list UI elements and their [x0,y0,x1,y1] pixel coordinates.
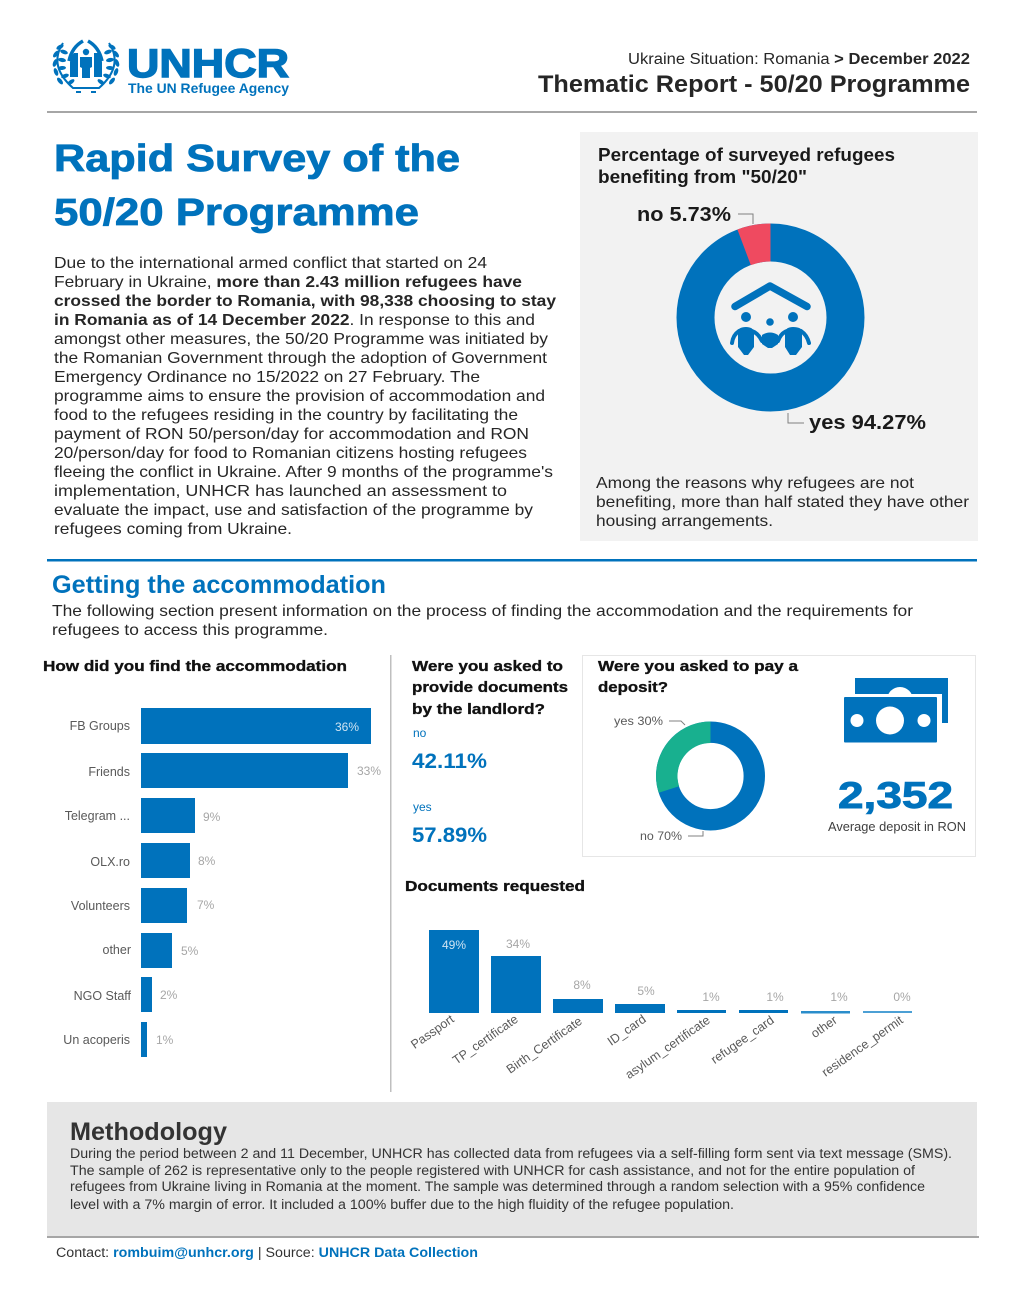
category labels: Telegram ... [65,809,130,823]
column labels: Passport [408,1012,457,1052]
main title [54,138,460,234]
value labels [156,720,381,1047]
section heading: Getting the accommodation [52,571,386,599]
panel note [596,475,970,530]
columns [429,930,912,1014]
column labels: asylum_certificate [623,1013,713,1082]
category labels: Volunteers [71,899,130,913]
column labels [408,1012,906,1082]
column values: 49% [442,938,466,952]
value labels: 8% [198,854,216,868]
column labels: ID_card [605,1012,649,1049]
value labels: 5% [181,944,199,958]
column labels: Birth_Certificate [504,1014,585,1076]
panel heading: Percentage of surveyed refugees [598,145,895,165]
introduction text: Due to the international armed conflict that started on 24 [54,255,487,272]
question heading [412,658,568,718]
stat: yes: yes [413,800,432,814]
donut chart: benefiting [696,223,846,392]
report context: Ukraine Situation: Romania > December 2022 [628,51,970,68]
callout: no [640,829,703,843]
icon: banknotes [844,678,948,742]
deposit heading: Were you asked to pay a [598,658,799,675]
introduction text: Emergency Ordinance no 15/2022 on 27 February. The [54,369,480,386]
methodology text [70,1146,952,1212]
value labels: 36% [335,720,359,734]
introduction text: the Romanian Government through the adoption of Government [54,350,548,367]
methodology heading: Methodology [70,1118,227,1146]
stat: no [412,726,487,773]
stat: yes [412,800,487,847]
value labels: 9% [203,810,221,824]
bar chart: finding accommodation [43,658,381,1057]
column values: 34% [506,937,530,951]
callout: yes [614,714,685,728]
column values: 0% [893,990,911,1004]
column values: 1% [830,990,848,1004]
panel note: benefiting, more than half stated they have other [596,494,970,511]
panel heading: benefiting from "50/20" [598,167,807,187]
category labels [63,719,132,1047]
introduction text: amongst other measures, the 50/20 Programme was initiated by [54,331,548,348]
stat: yes: 57.89% [412,824,487,847]
stat: no: 42.11% [412,750,487,773]
main title: Rapid Survey of the [54,138,460,180]
panel: methodology [47,1102,977,1237]
stat: average deposit: 2,352 [838,775,953,816]
logo tagline: The UN Refugee Agency [128,80,289,96]
value labels: 1% [156,1033,174,1047]
introduction text: evaluate the impact, use and satisfaction of the programme by [54,502,533,519]
category labels: FB Groups [70,719,130,733]
introduction text: 20/person/day for food to Romanian citizens hosting refugees [54,445,527,462]
deposit heading [598,658,799,696]
chart heading: Documents requested [405,878,585,895]
column chart: documents requested [405,878,912,1082]
section intro [52,603,914,639]
question heading: by the landlord? [412,701,545,718]
column labels: other [808,1013,840,1041]
main title: 50/20 Programme [54,192,419,234]
report title: Thematic Report - 50/20 Programme [538,71,970,98]
category labels: OLX.ro [90,855,130,869]
category labels: other [102,943,131,957]
documents question [412,658,568,847]
stat caption: Average deposit in RON [828,820,966,834]
chart heading: How did you find the accommodation [43,658,347,675]
introduction text: food to the refugees residing in the country by facilitating the [54,407,518,424]
header text [538,51,970,98]
column labels: TP_certificate [450,1012,521,1067]
introduction text: programme aims to ensure the provision of accommodation and [54,388,545,405]
panel note: Among the reasons why refugees are not [596,475,915,492]
introduction text: fleeing the conflict in Ukraine. After 9 months of the programme's [54,464,553,481]
column values: 5% [637,984,655,998]
introduction text: crossed the border to Romania, with 98,338 choosing to stay [54,293,556,310]
panel: percentage benefiting [580,132,978,541]
panel note: housing arrangements. [596,513,773,530]
donut chart: deposit [656,722,754,820]
panel heading [598,145,895,187]
methodology text: The sample of 262 is representative only to the people registered with UNHCR for cash assistance, and not for the entire population of [70,1163,915,1178]
introduction text: in Romania as of 14 December 2022 . In response to this and [54,312,535,329]
question heading: Were you asked to [412,658,563,675]
column values: 1% [702,990,720,1004]
icon: UNHCR emblem [52,41,120,93]
footer: Contact: rombuim@unhcr.org | Source: UNHCR Data Collection [56,1245,478,1260]
value labels: 33% [357,764,381,778]
column labels: refugee_card [708,1013,777,1067]
callout: no: no 70% [640,829,682,843]
introduction text: implementation, UNHCR has launched an assessment to [54,483,507,500]
category labels: Un acoperis [63,1033,130,1047]
icon: family under roof [732,286,809,355]
callout: yes: yes 94.27% [809,412,926,434]
question heading: provide documents [412,679,568,696]
callout: no: no 5.73% [637,204,731,226]
category labels: Friends [88,765,130,779]
column labels: residence_permit [819,1013,906,1079]
column values: 1% [766,990,784,1004]
panel: deposit [582,656,976,856]
bars [141,708,371,1057]
methodology text: refugees from Ukraine living in Romania at the moment. The sample was determined through a random selection with a 95% confidence [70,1179,925,1194]
UNHCR logo [52,41,289,96]
value labels: 7% [197,898,215,912]
introduction text: February in Ukraine, more than 2.43 million refugees have [54,274,522,291]
value labels: 2% [160,988,178,1002]
section intro: The following section present information on the process of finding the accommodation and the requirements for [52,603,914,620]
introduction text [54,255,556,538]
stat: no: no [413,726,427,740]
methodology text: level with a 7% margin of error. It included a 100% buffer due to the high fluidity of the refugee population. [70,1197,734,1212]
methodology text: During the period between 2 and 11 December, UNHCR has collected data from refugees via a self-filling form sent via text message (SMS). [70,1146,952,1161]
callout: yes: yes 30% [614,714,663,728]
introduction text: refugees coming from Ukraine. [54,521,292,538]
category labels: NGO Staff [74,989,132,1003]
column values: 8% [573,978,591,992]
logo wordmark: UNHCR [127,42,289,86]
introduction text: payment of RON 50/person/day for accommodation and RON [54,426,529,443]
section intro: refugees to access this programme. [52,622,328,639]
deposit heading: deposit? [598,679,668,696]
column values [442,937,911,1004]
